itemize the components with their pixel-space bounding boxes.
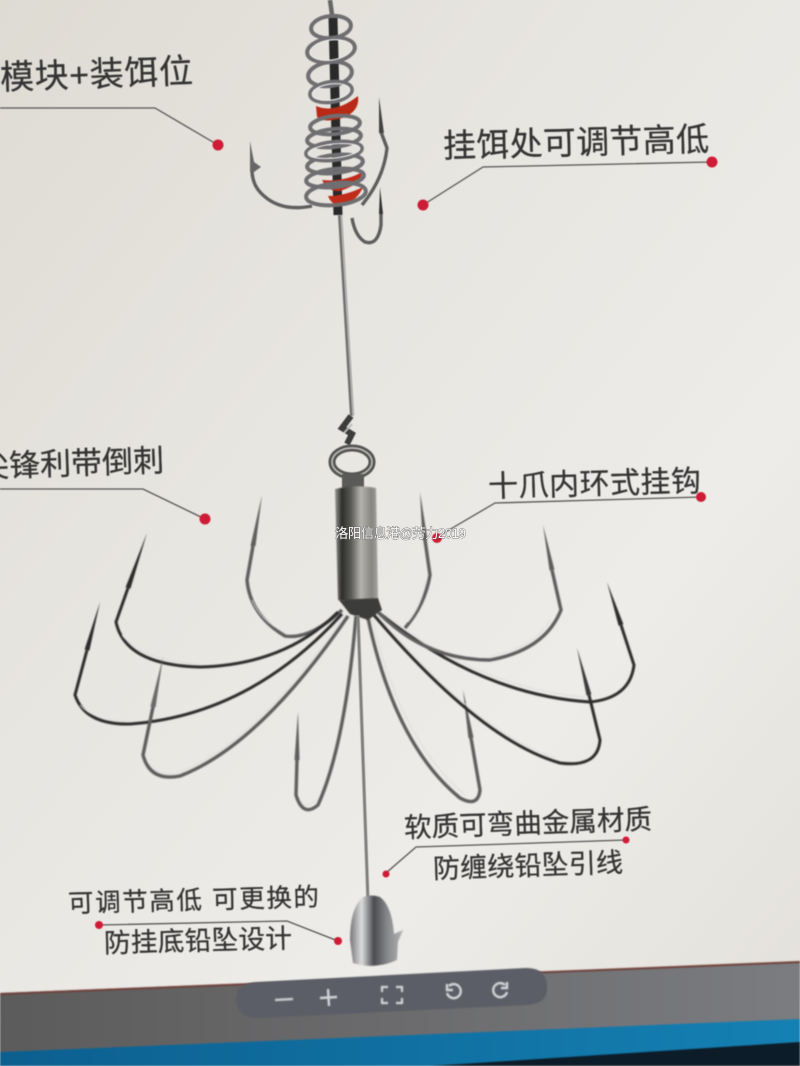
hook 4 [143, 614, 348, 777]
watermark: 洛阳信息港@劳力2019 [335, 525, 466, 541]
callout: adjustable bait position: 挂饵处可调节高低 [443, 120, 710, 164]
ten claw hooks [75, 492, 634, 810]
icon: plus [320, 989, 337, 1006]
callout: soft metal leader: 防缠绕铅坠引线 [433, 848, 623, 884]
callout: replaceable sinker: 可调节高低 可更换的 [68, 884, 319, 918]
icon: rotate left [447, 984, 461, 998]
hook 9 [378, 525, 561, 660]
hook 1 [247, 495, 342, 636]
hook 6 [368, 618, 480, 802]
hook 5 [294, 616, 356, 810]
callout: adjustable bait position [418, 120, 718, 210]
barrel connector [335, 486, 378, 602]
icon: minus [275, 999, 293, 1000]
callout: ten claw inner ring hook: 十爪内环式挂钩 [488, 465, 701, 504]
lead sinker [350, 896, 403, 966]
callout: ten claw inner ring hook [432, 465, 706, 543]
red bead upper [316, 96, 358, 120]
hook 8 [378, 582, 634, 702]
hook 3 [75, 602, 342, 724]
icon: rotate right [493, 982, 507, 997]
sinker wire [358, 615, 368, 902]
treble hook [250, 97, 387, 243]
callout: sharp barbed tip [0, 443, 211, 524]
swivel and ring [332, 416, 372, 488]
callout: bait module [0, 53, 224, 150]
callout: replaceable sinker [68, 884, 342, 958]
hook 7 [373, 614, 600, 764]
callout: replaceable sinker: 防挂底铅坠设计 [104, 924, 292, 958]
callout: soft metal leader: 软质可弯曲金属材质 [404, 804, 652, 843]
top rod [330, 0, 353, 416]
callout: bait module: 模块+装饵位 [0, 53, 194, 97]
icon: fullscreen [382, 987, 402, 1003]
hook hub [339, 598, 382, 620]
hook 10 [405, 492, 430, 628]
red bead lower [322, 172, 362, 191]
hook 2 [116, 533, 338, 667]
screen bezel [0, 962, 800, 1066]
toolbar [236, 968, 547, 1018]
callout: soft metal leader [382, 804, 652, 884]
spring coil with red beads [305, 14, 367, 215]
